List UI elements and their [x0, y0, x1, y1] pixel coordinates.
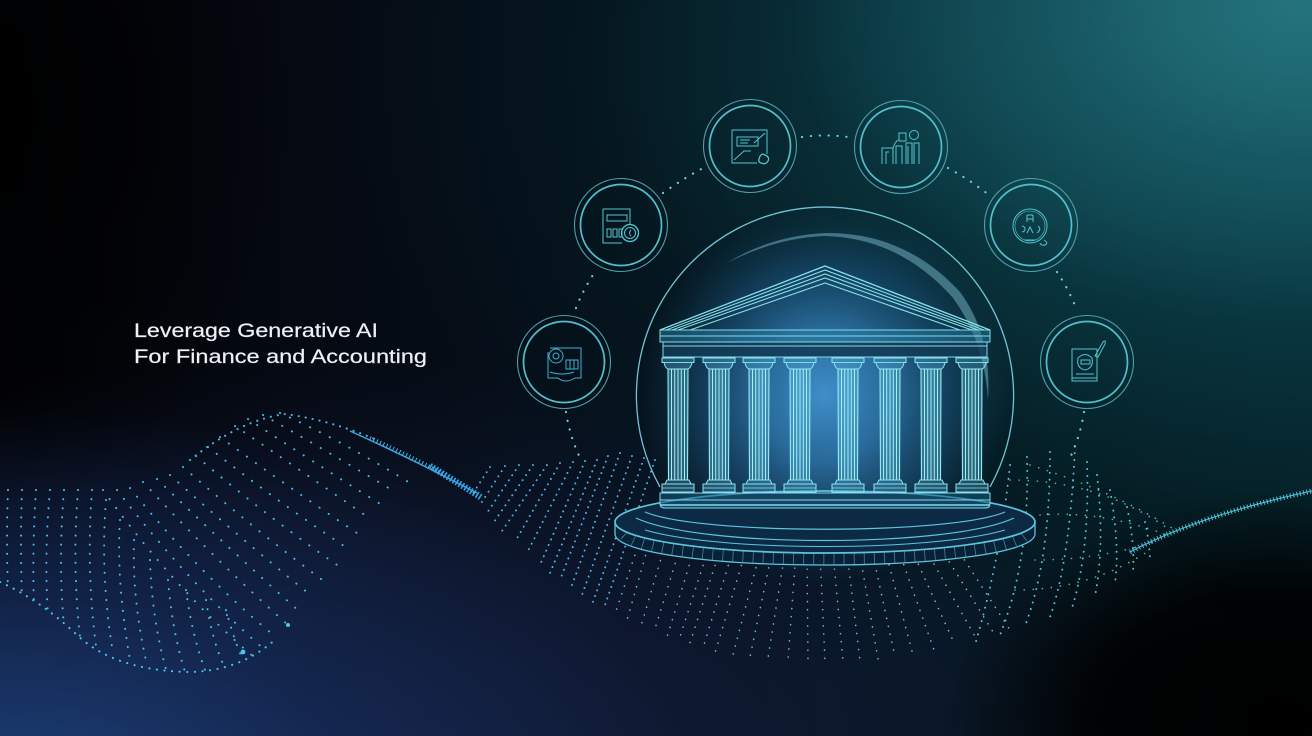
- right mesh rows: [1010, 465, 1172, 590]
- dome highlight: [727, 233, 988, 400]
- dotted wave: left mesh: [0, 413, 482, 672]
- lower fan lines: [615, 540, 1010, 661]
- title line 1: Leverage Generative AI: [134, 320, 378, 342]
- blue glow: [638, 205, 1012, 585]
- icon ring 2: calculator: [574, 178, 668, 272]
- step arcs: [645, 512, 1005, 529]
- icon: signed document: [1072, 341, 1105, 381]
- left fan lines: [472, 453, 655, 608]
- title: [134, 320, 427, 368]
- left strand ticks: [370, 438, 455, 481]
- dotted orbit connecting icons: [566, 136, 1084, 462]
- left strand: [350, 431, 477, 493]
- left strand bright end: [430, 466, 482, 498]
- lower step rim: [615, 522, 1035, 565]
- icon: receipt with gear: [548, 348, 581, 381]
- icon: report with trend line: [732, 130, 769, 164]
- columns: [662, 358, 988, 492]
- rim ticks: [625, 534, 1025, 559]
- title line 2: For Finance and Accounting: [134, 346, 427, 368]
- wave bottom rim: [0, 582, 277, 672]
- outer disc: [615, 491, 1035, 553]
- large dot 2: [286, 623, 290, 627]
- icon: dial with symbols: [1013, 209, 1047, 245]
- large dots: [241, 650, 245, 654]
- icon ring 3: chart document: [704, 100, 796, 192]
- right strand core: [1130, 491, 1312, 552]
- icon ring 6: document and pen: [1040, 316, 1134, 408]
- icon ring 1: invoice and coin: [518, 316, 610, 408]
- icon: calculator and coin: [603, 209, 638, 243]
- right fan lines: [975, 446, 1150, 645]
- wave top rim: [190, 414, 377, 460]
- icon: bars with tokens: [882, 130, 919, 164]
- glass dome: [636, 207, 1014, 487]
- entablature: [660, 330, 990, 357]
- wave columns: [7, 490, 243, 672]
- right strand ticks: [1130, 491, 1312, 552]
- icon ring 5: circular flow: [984, 178, 1078, 272]
- temple and dome: [615, 205, 1035, 585]
- icon ring 4: bar chart: [854, 100, 948, 194]
- wave rows: [103, 413, 410, 658]
- pediment: [660, 266, 990, 330]
- stylobate: [660, 493, 990, 508]
- dotted wave: centre mesh: [472, 446, 1312, 661]
- platform steps: [615, 491, 1035, 565]
